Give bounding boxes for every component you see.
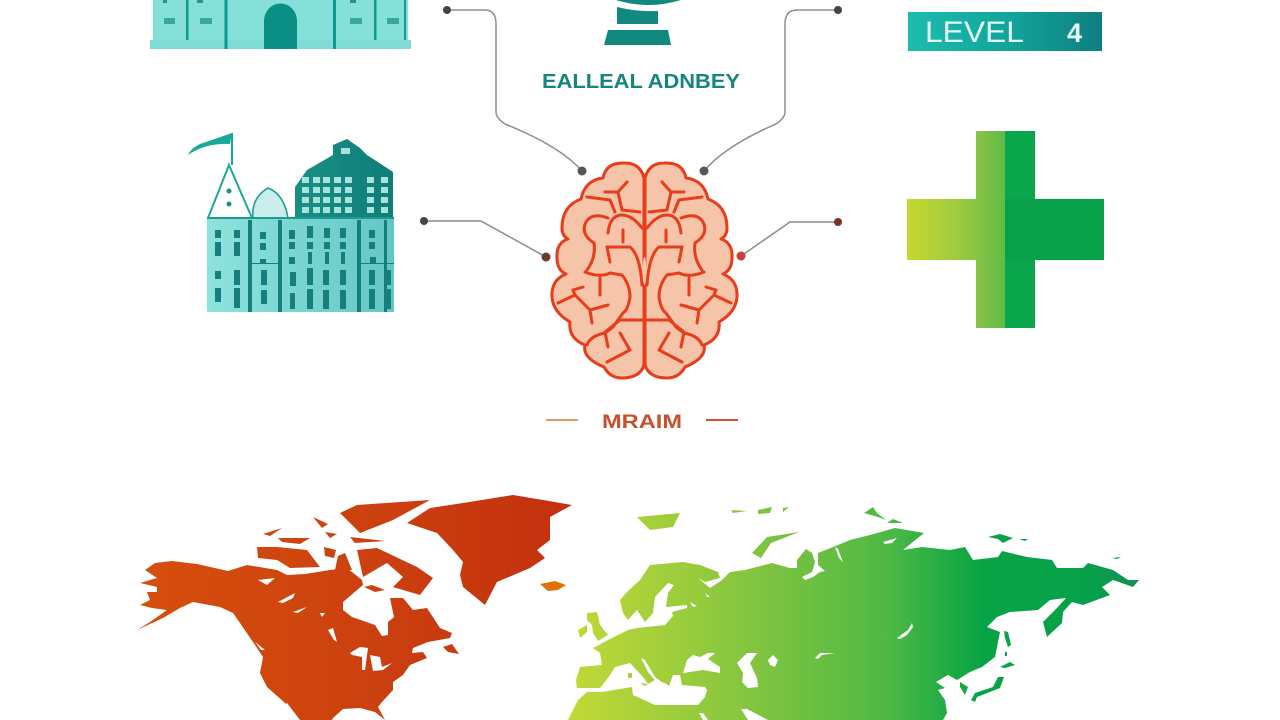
arrow: connector middle right <box>736 218 842 260</box>
map: world map <box>137 495 1139 720</box>
icon: castle building top left <box>150 0 411 49</box>
heading: globe label: EALLEAL ADNBEY <box>542 71 741 93</box>
icon: globe on stand <box>604 0 681 45</box>
level badge <box>908 12 1102 51</box>
map: lakes <box>255 578 392 720</box>
palace dark roof <box>295 139 393 218</box>
icon: palace building left <box>188 133 394 312</box>
castle door <box>264 3 297 49</box>
map: islands <box>578 507 1121 702</box>
map: North America and Greenland <box>137 495 572 720</box>
brain right hemisphere <box>645 163 737 378</box>
arrow: connector top right <box>700 6 842 176</box>
map: seas <box>560 538 913 720</box>
palace flag <box>188 133 232 155</box>
level badge: LEVEL <box>925 16 1024 49</box>
map: Eurasia and Africa <box>568 528 1139 720</box>
map: Iceland <box>540 581 566 591</box>
palace lower facade <box>207 218 394 312</box>
icon: brain <box>552 163 737 378</box>
arrow: connector top left <box>443 6 586 176</box>
arrow: connector middle left <box>420 217 550 262</box>
level badge: 4 <box>1067 18 1082 48</box>
label: brain caption: MRAIM <box>602 411 682 433</box>
icon: green plus cross <box>907 131 1104 328</box>
brain left hemisphere <box>552 163 644 378</box>
